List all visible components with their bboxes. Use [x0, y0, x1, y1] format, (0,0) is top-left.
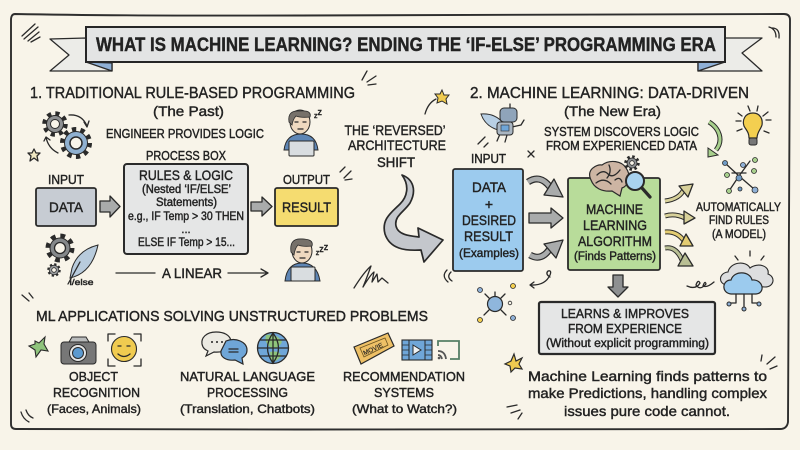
panel: reversed architecture shift — [344, 90, 449, 262]
box: learns and improves: (Without explicit programming) — [546, 338, 709, 350]
arrow: bottom wavy input — [530, 240, 563, 258]
label: automatically find rules: AUTOMATICALLY — [696, 202, 781, 214]
decorative scribble top left — [22, 24, 40, 42]
icon: network — [722, 158, 758, 194]
arrow: rules to result — [251, 197, 272, 216]
label: recommendation systems: SYSTEMS — [374, 385, 434, 400]
box: data: DATA — [49, 199, 84, 215]
panel: traditional programming — [28, 85, 355, 287]
text: summary: make Predictions, handling complex — [528, 385, 767, 401]
icon: shooting star — [425, 90, 449, 114]
label: nlp: NATURAL LANGUAGE — [180, 369, 315, 384]
label: zzz: z — [314, 113, 318, 120]
heading: traditional: 1. TRADITIONAL RULE-BASED PROGRAMMING — [30, 85, 355, 102]
box: data and desired result: + — [485, 196, 493, 212]
box: data and desired result: (Examples) — [459, 246, 519, 260]
arrow: middle input — [529, 208, 563, 228]
spark right — [761, 355, 777, 369]
label: a linear — [116, 265, 268, 281]
label: input: INPUT — [48, 173, 84, 187]
icon: camera — [61, 337, 96, 364]
icon: gears and quill — [48, 236, 98, 287]
arrow: big curved — [384, 175, 443, 262]
label: zzz bottom: z — [324, 242, 329, 252]
sound marks bottom left — [21, 410, 33, 422]
label: nlp — [180, 369, 315, 416]
icon: hub network — [478, 284, 516, 322]
arrow: down to learns — [608, 275, 628, 297]
box: learns and improves — [539, 302, 715, 354]
label: object recognition — [47, 369, 141, 416]
arrow: top wavy input — [528, 179, 563, 197]
arrow: green curved — [708, 122, 720, 157]
subheading: the past: (The Past) — [153, 103, 224, 119]
box: rules and logic — [124, 164, 248, 254]
spark near result — [340, 167, 352, 180]
squiggle — [687, 281, 714, 288]
box: rules and logic: ELSE IF Temp > 15... — [138, 237, 235, 249]
box: data and desired result — [453, 169, 523, 271]
title: WHAT IS MACHINE LEARNING? ENDING THE ‘IF-ELSE’ PROGRAMMING ERA — [96, 35, 716, 56]
box: learns and improves: LEARNS & IMPROVES — [561, 306, 689, 321]
heading: applications: ML APPLICATIONS SOLVING UNSTRUCTURED PROBLEMS — [36, 308, 428, 325]
scribble middle — [354, 266, 388, 288]
box: ml algorithm: LEARNING — [583, 217, 647, 233]
label: system discovers logic: SYSTEM DISCOVERS LOGIC — [544, 125, 699, 139]
icon: cast screen — [438, 341, 459, 359]
icon: yellow star — [505, 354, 522, 372]
label: zzz bottom: z — [316, 250, 319, 257]
text: summary: issues pure code cannot. — [564, 403, 730, 419]
sound marks top right — [769, 27, 779, 38]
box: rules and logic: e.g., IF Temp > 30 THEN — [128, 211, 244, 223]
spark top — [362, 71, 376, 85]
box: rules and logic: (Nested ‘IF/ELSE’ — [142, 184, 231, 196]
icon: face recognition — [108, 334, 141, 366]
label: system discovers logic — [544, 125, 699, 153]
label: engineer provides logic: ENGINEER PROVIDES LOGIC — [106, 127, 264, 141]
icon: chat bubbles — [202, 332, 247, 364]
icon: green star — [29, 337, 48, 357]
text: summary — [528, 368, 767, 419]
spark left of summary — [507, 405, 522, 419]
subheading: the new era: (The New Era) — [564, 103, 661, 119]
icon: person at laptop top — [284, 107, 322, 156]
box: ml algorithm: MACHINE — [586, 201, 643, 217]
arrow: data to rules — [100, 196, 120, 217]
icon: light bulb — [736, 106, 771, 145]
box: ml algorithm: ALGORITHM — [578, 233, 652, 249]
heading: reversed shift: SHIFT — [377, 154, 415, 170]
heading: reversed shift: THE ‘REVERSED’ — [344, 122, 446, 138]
box: learns and improves: FROM EXPERIENCE — [568, 321, 682, 336]
icon: star small — [28, 149, 40, 161]
icon: globe — [258, 332, 288, 364]
label: automatically find rules — [696, 202, 781, 241]
label: a linear: A LINEAR — [162, 265, 222, 281]
label: process box: PROCESS BOX — [146, 149, 227, 163]
label: automatically find rules: FIND RULES — [709, 215, 769, 227]
box: rules and logic: Statements) — [156, 197, 217, 209]
box: result — [275, 188, 338, 226]
label: recommendation systems: RECOMMENDATION — [343, 369, 465, 384]
box: ml algorithm — [568, 178, 660, 270]
spark left edge — [22, 293, 33, 301]
box: data and desired result: DATA — [472, 179, 507, 195]
label: zzz: z — [318, 107, 322, 117]
arrows: outputs to rules — [665, 184, 695, 266]
label: zzz bottom: z — [319, 244, 324, 254]
heading: reversed shift — [344, 122, 446, 170]
loop arrow — [530, 271, 551, 288]
box: result: RESULT — [282, 199, 331, 215]
panel: ml applications — [29, 308, 465, 416]
box: ml algorithm: (Finds Patterns) — [574, 251, 656, 263]
panel: machine learning — [444, 85, 781, 419]
text: summary: Machine Learning finds patterns to — [528, 368, 767, 384]
box: data and desired result: RESULT — [464, 228, 513, 244]
icon: gears top — [44, 114, 90, 156]
heading: machine learning: 2. MACHINE LEARNING: DATA-DRIVEN — [470, 85, 749, 102]
icon: film play — [402, 340, 432, 360]
sound marks — [444, 270, 452, 282]
title banner — [50, 27, 762, 71]
icon: flying robot — [478, 104, 524, 147]
label: object recognition: OBJECT — [69, 369, 118, 384]
icon: brain gear magnifier — [590, 157, 650, 197]
label: recommendation systems — [343, 369, 465, 416]
box: data and desired result: DESIRED — [462, 212, 516, 228]
label: nlp: (Translation, Chatbots) — [180, 402, 315, 416]
heading: reversed shift: ARCHITECTURE — [348, 137, 446, 153]
label: system discovers logic: FROM EXPERIENCED DATA — [546, 139, 698, 153]
label: output: OUTPUT — [283, 173, 330, 187]
icon: person at laptop bottom — [285, 239, 329, 281]
label: object recognition: RECOGNITION — [53, 385, 140, 400]
icon: movie ticket — [354, 333, 394, 364]
box: rules and logic: ... — [181, 224, 191, 236]
label: input: INPUT — [471, 152, 506, 166]
label: automatically find rules: (A MODEL) — [712, 229, 766, 241]
label: if else: i/else — [70, 277, 94, 287]
icon: cloud — [720, 251, 773, 311]
icon: movie ticket: MOVIE — [362, 342, 385, 357]
label: nlp: PROCESSING — [207, 385, 288, 400]
label: object recognition: (Faces, Animals) — [47, 402, 141, 416]
box: rules and logic: RULES & LOGIC — [139, 167, 233, 183]
label: recommendation systems: (What to Watch?) — [352, 402, 457, 416]
box: data — [36, 188, 96, 226]
mark x — [528, 151, 534, 157]
